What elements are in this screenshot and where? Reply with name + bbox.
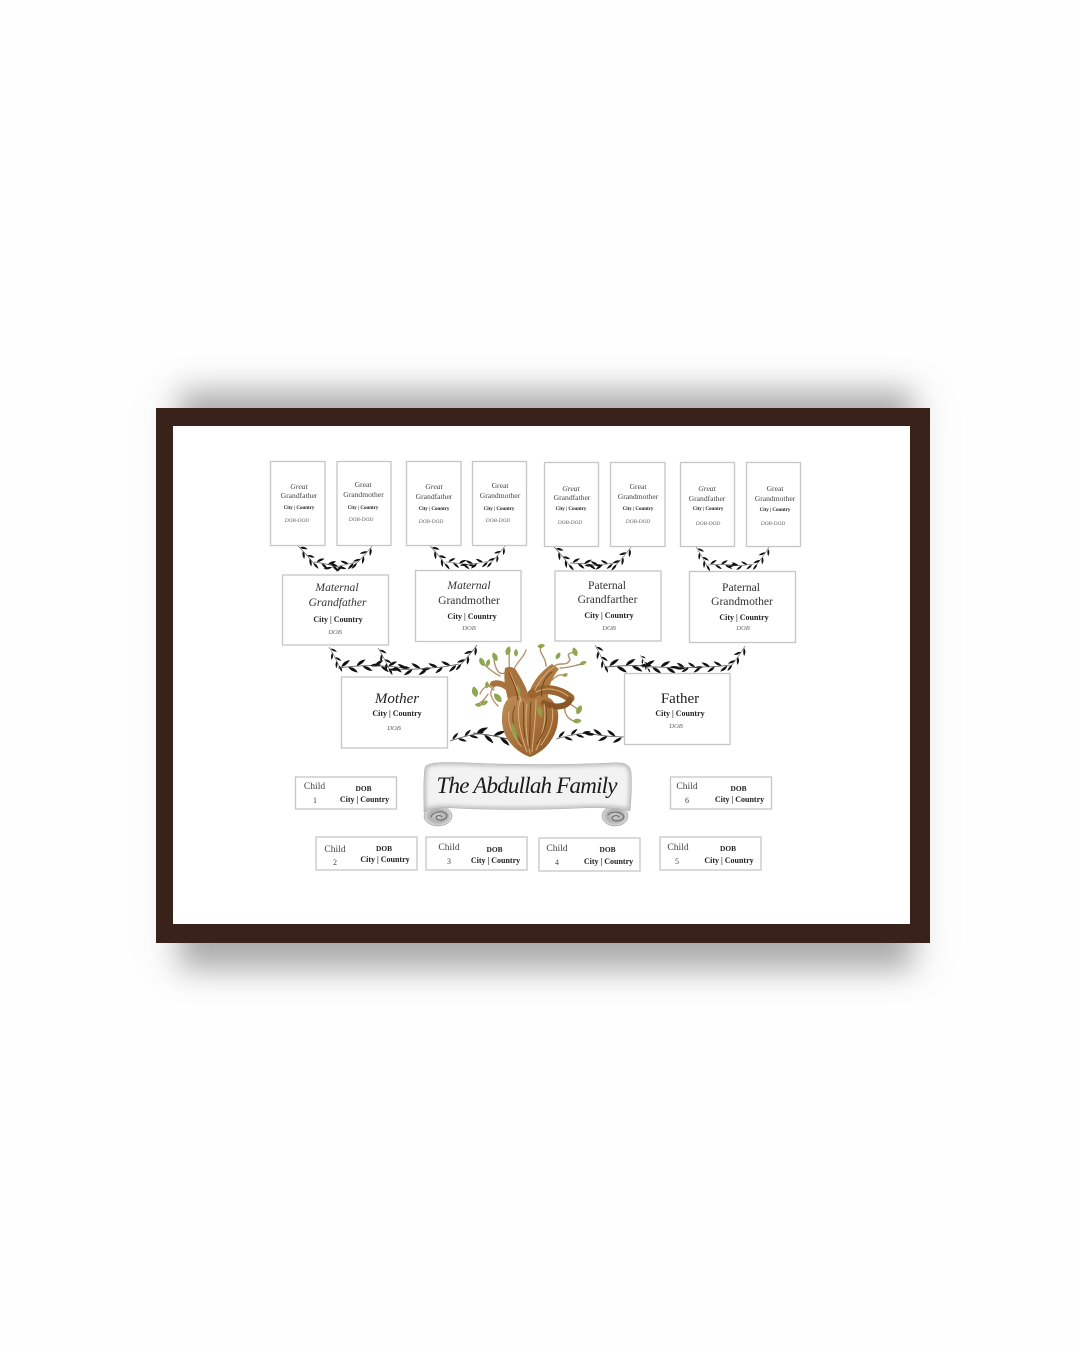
great grandparent card 6: City | Country: [623, 507, 654, 512]
great grandparent card 1: City | Country: [284, 506, 315, 511]
child card 1: Child: [304, 781, 325, 792]
card: maternal grandfather: Maternal: [314, 581, 359, 594]
child card 2: DOB: [376, 844, 392, 853]
child card 6: 6: [685, 796, 689, 805]
child card 6: DOB: [730, 784, 747, 793]
child card 3: DOB: [486, 845, 503, 854]
title banner: [424, 763, 631, 826]
card: paternal grandfather: [555, 571, 661, 641]
great grandparent card 8: Grandmother: [755, 494, 796, 503]
card: paternal grandfather: City | Country: [584, 611, 634, 620]
white poster paper: [173, 426, 910, 924]
card: mother: [342, 677, 448, 748]
great grandparent card 5: [544, 462, 598, 546]
child card 6: [670, 777, 772, 809]
card: paternal grandfather: Grandfarther: [578, 593, 638, 606]
card: maternal grandmother: Maternal: [446, 579, 491, 592]
card: mother: Mother: [374, 691, 419, 707]
child card 4: City | Country: [584, 857, 633, 866]
card: maternal grandfather: [282, 575, 388, 645]
vines: grandparents to parents: [325, 642, 750, 678]
great grandparent card 7: Great: [698, 484, 717, 493]
card: paternal grandmother: DOB: [735, 625, 750, 632]
card: paternal grandfather: DOB: [601, 625, 616, 632]
great grandparent card 3: [406, 462, 461, 546]
title text: The Abdullah Family: [436, 773, 618, 798]
card: maternal grandfather: Grandfather: [309, 596, 367, 609]
great grandparent card 4: Great: [492, 481, 509, 490]
great grandparent card 7: Grandfather: [689, 494, 726, 503]
child card 4: DOB: [599, 845, 616, 854]
leaves: [471, 643, 587, 724]
dark brown frame: [156, 408, 930, 943]
child card 2: Child: [324, 844, 346, 855]
child card 2: City | Country: [360, 855, 410, 864]
child card 3: 3: [447, 857, 451, 866]
great grandparent card 5: City | Country: [556, 507, 587, 512]
great grandparent card 2: [337, 462, 391, 546]
great grandparent card 7: City | Country: [693, 507, 724, 512]
great grandparent card 3: DOB-DOD: [418, 519, 443, 525]
great grandparent card 2: Great: [355, 480, 372, 489]
great grandparent card 5: DOB-DOD: [557, 520, 582, 526]
great grandparent card 4: Grandmother: [480, 491, 521, 500]
great grandparent card 5: Great: [562, 484, 581, 493]
great grandparent card 6: DOB-DOD: [625, 519, 650, 525]
card: father: Father: [661, 691, 699, 707]
great grandparent card 2: Grandmother: [343, 490, 384, 499]
great grandparent card 7: [680, 462, 734, 546]
child card 1: City | Country: [340, 795, 389, 804]
child card 5: Child: [667, 842, 689, 853]
child card 3: Child: [438, 842, 460, 853]
scroll curls: [424, 806, 628, 826]
card: mother: City | Country: [372, 709, 422, 718]
card: maternal grandmother: [416, 570, 521, 642]
framed family tree poster: [156, 371, 934, 989]
great grandparent card 4: DOB-DOD: [485, 518, 510, 524]
child card 5: DOB: [720, 844, 736, 853]
vines: great grandparents to grandparents: [294, 542, 774, 575]
child card 1: [296, 777, 396, 809]
card: father: City | Country: [655, 709, 705, 718]
great grandparent card 6: Great: [630, 482, 647, 491]
icon: heart shaped tree: [471, 643, 587, 757]
great grandparent card 7: DOB-DOD: [695, 521, 720, 527]
child card 5: 5: [675, 857, 679, 866]
card: paternal grandmother: [690, 572, 796, 642]
child card 6: Child: [676, 781, 698, 792]
great grandparent card 8: City | Country: [760, 508, 791, 513]
child card 6: City | Country: [715, 795, 764, 804]
card: paternal grandmother: Paternal: [722, 581, 760, 594]
card: mother: DOB: [386, 725, 401, 732]
great grandparent card 5: Grandfather: [554, 493, 591, 502]
great grandparent card 1: Great: [290, 482, 309, 491]
great grandparent card 8: DOB-DOD: [760, 521, 785, 527]
card: maternal grandmother: Grandmother: [438, 594, 500, 607]
great grandparent card 2: City | Country: [348, 506, 379, 511]
trunks and body: [504, 667, 531, 708]
card: maternal grandfather: DOB: [327, 629, 342, 636]
child card 1: DOB: [355, 784, 372, 793]
child card 4: [539, 838, 640, 871]
card: maternal grandmother: City | Country: [447, 612, 497, 621]
child card 3: City | Country: [471, 856, 520, 865]
card: father: [624, 674, 730, 744]
great grandparent card 1: DOB-DOD: [284, 518, 309, 524]
great grandparent card 1: Grandfather: [281, 491, 318, 500]
great grandparent card 6: Grandmother: [618, 492, 659, 501]
card: maternal grandmother: DOB: [461, 625, 476, 632]
great grandparent card 4: [472, 462, 526, 546]
child card 4: Child: [546, 843, 568, 854]
frame shadow: [150, 380, 940, 980]
child card 1: 1: [313, 796, 317, 805]
great grandparent card 1: [270, 462, 325, 546]
thin branches: [478, 646, 584, 721]
card: father: DOB: [668, 723, 683, 730]
great grandparent card 8: Great: [767, 484, 784, 493]
great grandparent card 3: Great: [425, 482, 444, 491]
child card 5: City | Country: [704, 856, 754, 865]
child card 2: [316, 837, 417, 870]
card: paternal grandmother: Grandmother: [711, 595, 773, 608]
child card 2: 2: [333, 858, 337, 867]
bark strands: [509, 667, 568, 754]
great grandparent card 8: [746, 462, 800, 546]
child card 5: [660, 837, 761, 870]
card: paternal grandfather: Paternal: [588, 579, 626, 592]
card: paternal grandmother: City | Country: [719, 613, 769, 622]
great grandparent card 3: City | Country: [419, 507, 450, 512]
great grandparent card 3: Grandfather: [416, 492, 453, 501]
card: maternal grandfather: City | Country: [313, 615, 363, 624]
child card 4: 4: [555, 858, 559, 867]
great grandparent card 6: [610, 462, 665, 546]
great grandparent card 4: City | Country: [484, 507, 515, 512]
vines: parents to heart: [448, 723, 626, 749]
great grandparent card 2: DOB-DOD: [348, 517, 373, 523]
child card 3: [426, 837, 527, 870]
